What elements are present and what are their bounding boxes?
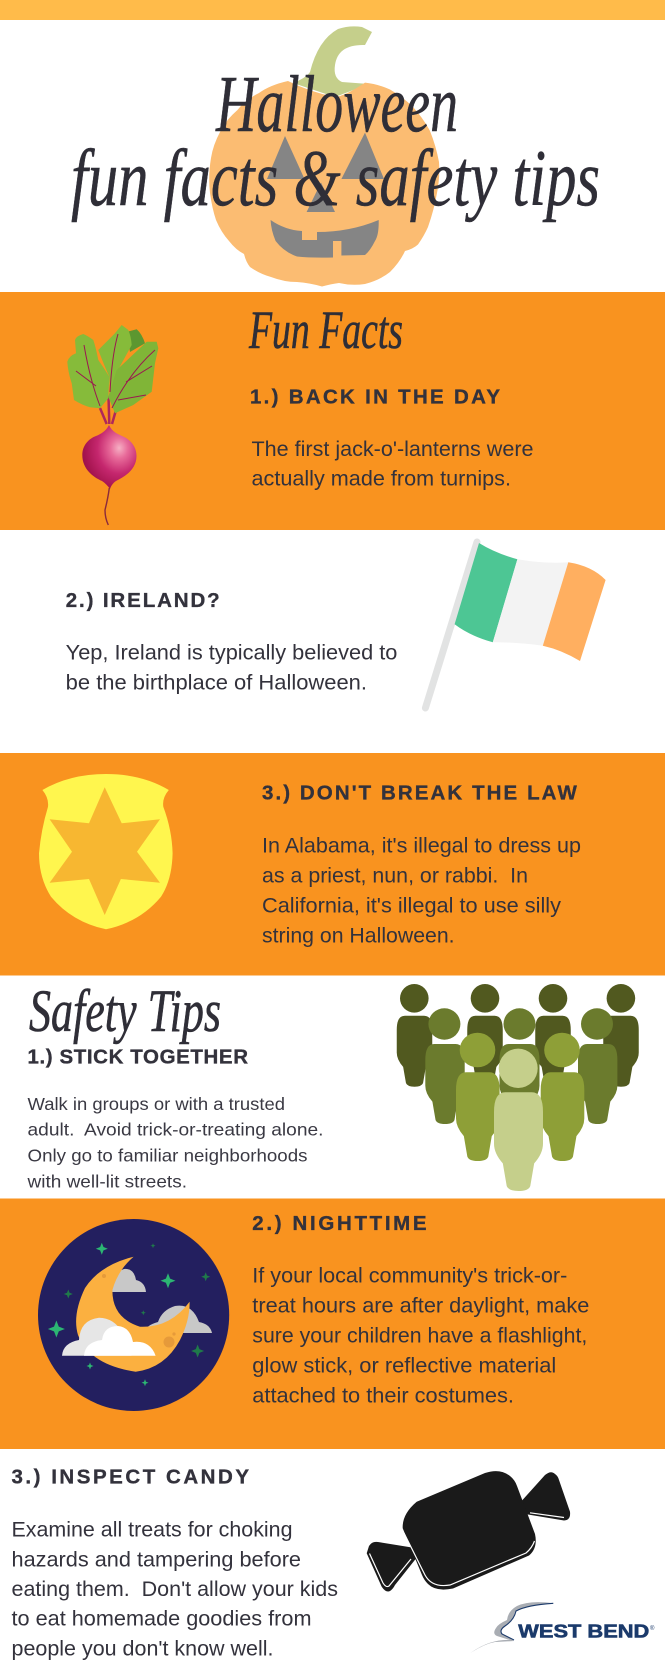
- heading: inspect candy: 3.) INSPECT CANDY: [12, 1465, 249, 1488]
- icon: moon and clouds: [38, 1219, 229, 1411]
- body text: string on Halloween.: [262, 924, 455, 947]
- body text: eating them. Don't allow your kids: [12, 1578, 338, 1601]
- body text: attached to their costumes.: [252, 1384, 514, 1407]
- body text: [26, 1094, 323, 1191]
- panel: ireland: [66, 542, 606, 708]
- logo: west bend: [470, 1602, 655, 1653]
- top bar: [0, 0, 665, 20]
- title: Halloween: [215, 61, 458, 149]
- icon: crowd of people: [397, 984, 639, 1191]
- body text: [252, 1265, 589, 1407]
- heading: back in the day: 1.) BACK IN THE DAY: [250, 386, 500, 408]
- body text: with well-lit streets.: [26, 1171, 187, 1191]
- body text: Walk in groups or with a trusted: [28, 1094, 285, 1114]
- heading: nighttime: 2.) NIGHTTIME: [252, 1212, 427, 1235]
- heading: stick together: 1.) STICK TOGETHER: [28, 1045, 248, 1068]
- body text: adult. Avoid trick-or-treating alone.: [28, 1120, 324, 1140]
- body text: [262, 835, 581, 947]
- icon: wrapped candy: [367, 1471, 570, 1591]
- body text: people you don't know well.: [12, 1637, 274, 1660]
- pumpkin illustration: [209, 26, 439, 286]
- body text: actually made from turnips.: [252, 468, 511, 490]
- logo: west bend: WEST BEND: [518, 1621, 649, 1641]
- body text: [12, 1519, 338, 1660]
- body text: Only go to familiar neighborhoods: [28, 1146, 308, 1166]
- body text: The first jack-o'-lanterns were: [252, 438, 534, 461]
- icon: sheriff badge: [39, 774, 173, 929]
- body text: [252, 438, 534, 490]
- body text: Yep, Ireland is typically believed to: [66, 641, 397, 664]
- heading: fun facts: Fun Facts: [248, 300, 403, 360]
- icon: beet: [67, 325, 158, 525]
- body text: In Alabama, it's illegal to dress up: [262, 835, 581, 858]
- body text: treat hours are after daylight, make: [252, 1295, 589, 1318]
- body text: as a priest, nun, or rabbi. In: [262, 865, 528, 888]
- panel: stick together: [26, 978, 639, 1191]
- icon: irish flag: [425, 542, 606, 708]
- body text: sure your children have a flashlight,: [252, 1325, 587, 1348]
- panel: inspect candy: [12, 1465, 655, 1660]
- body text: glow stick, or reflective material: [252, 1354, 556, 1377]
- body text: [66, 641, 397, 694]
- panel: don't break the law: [0, 753, 665, 976]
- panel: back in the day: [0, 292, 665, 530]
- panel: nighttime: [0, 1198, 665, 1449]
- title: [71, 61, 600, 223]
- body text: be the birthplace of Halloween.: [66, 671, 367, 694]
- body text: California, it's illegal to use silly: [262, 894, 562, 917]
- body text: hazards and tampering before: [12, 1548, 301, 1571]
- body text: to eat homemade goodies from: [12, 1608, 312, 1631]
- body text: Examine all treats for choking: [12, 1519, 292, 1542]
- heading: don't break the law: 3.) DON'T BREAK THE LAW: [262, 781, 577, 804]
- body text: If your local community's trick-or-: [252, 1265, 567, 1288]
- logo: west bend: ®: [650, 1625, 655, 1632]
- heading: ireland: 2.) IRELAND?: [66, 589, 220, 612]
- heading: safety tips: Safety Tips: [29, 978, 221, 1044]
